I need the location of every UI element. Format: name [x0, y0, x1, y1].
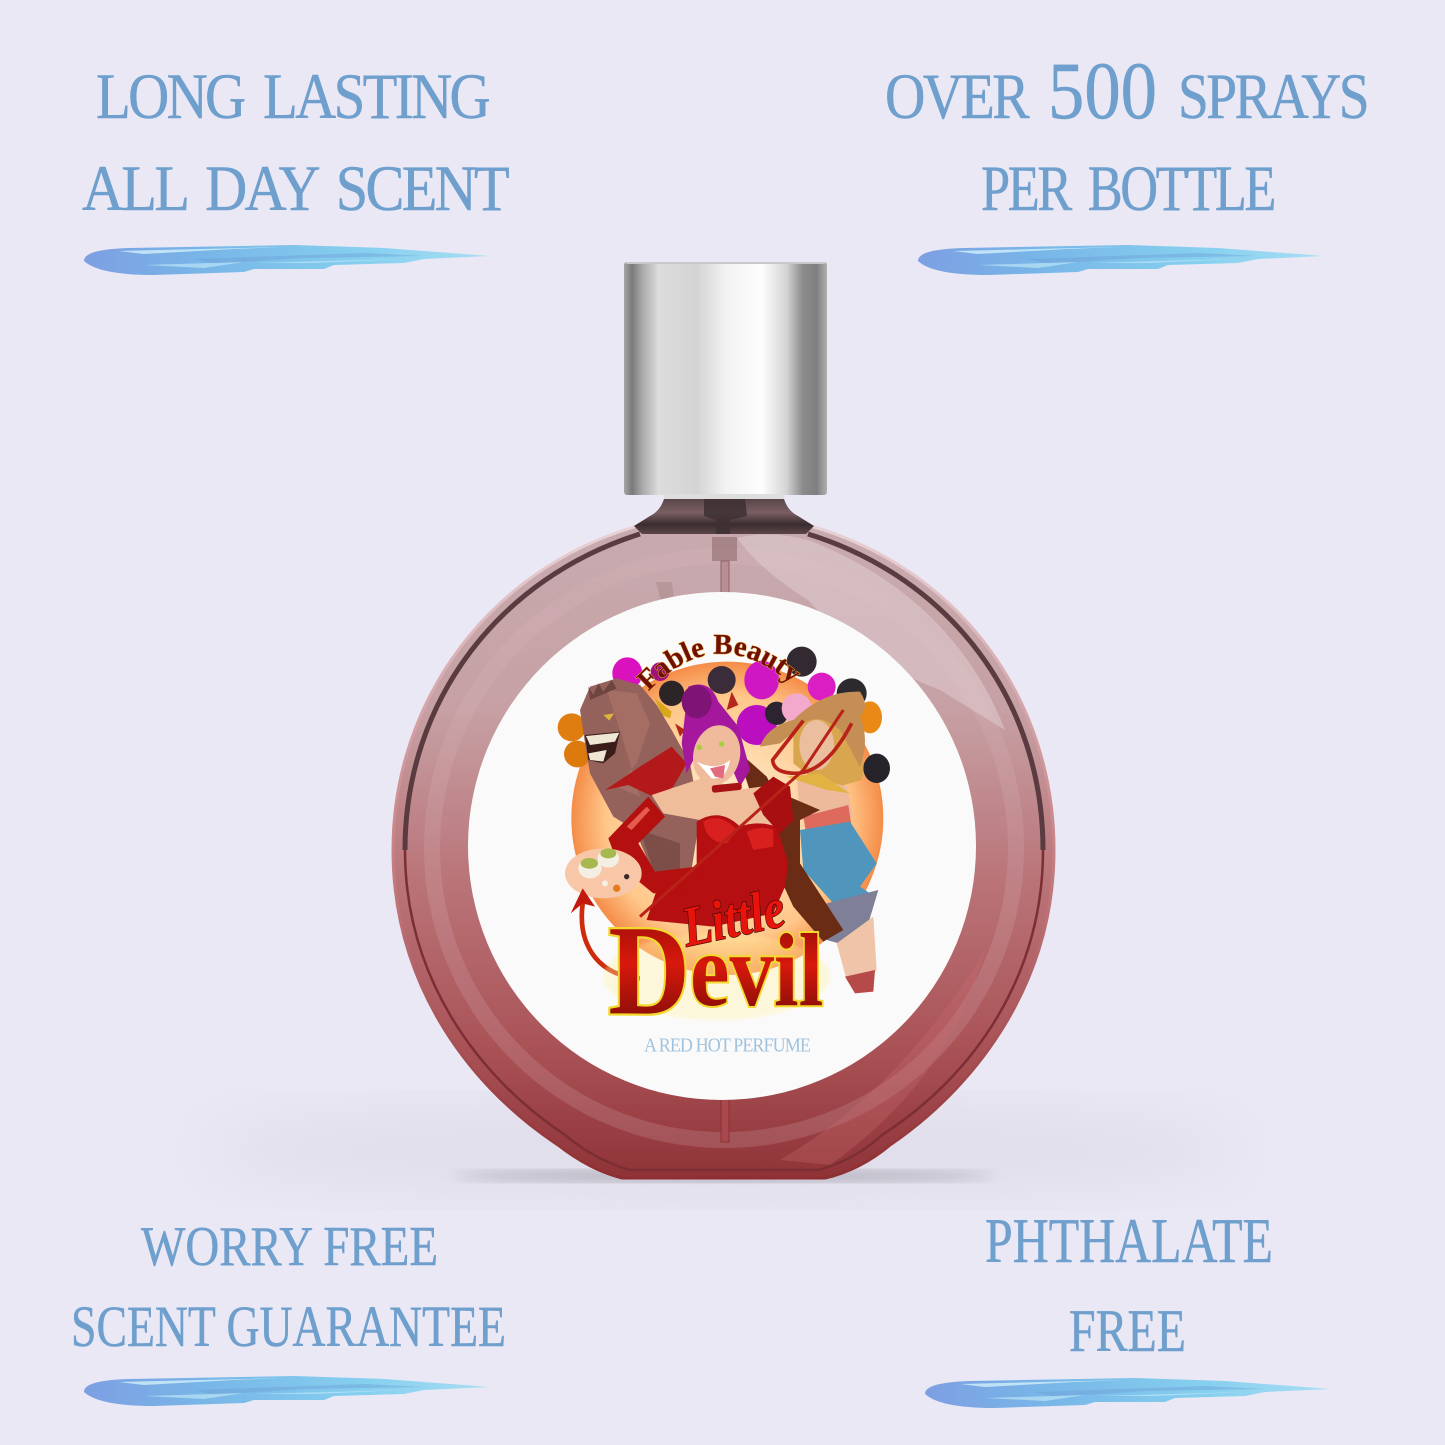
- heading: long lasting all day scent: LONG LASTING: [96, 61, 489, 133]
- lower reflection: [780, 950, 985, 1165]
- silver cap: [624, 262, 827, 499]
- heading: worry free scent guarantee: WORRY FREE: [141, 1216, 438, 1278]
- balloons: [558, 647, 890, 783]
- heading: worry free scent guarantee: SCENT GUARANTEE: [71, 1294, 506, 1359]
- round white label: [468, 592, 976, 1100]
- heading: phthalate free: [985, 1205, 1273, 1364]
- label illustration: [558, 634, 890, 1056]
- monster: [580, 678, 700, 900]
- brand arc text: Fable Beauty: Fable Beauty: [634, 634, 801, 692]
- inner dark rim upper: [405, 534, 1043, 850]
- heading: worry free scent guarantee: [71, 1216, 506, 1359]
- title: Little Devil: Little: [676, 877, 790, 960]
- heading: over 500 sprays per bottle: PER BOTTLE: [981, 153, 1274, 225]
- heading: over 500 sprays per bottle: [885, 45, 1367, 225]
- bottle neck: [634, 495, 814, 534]
- orange sun backdrop: [571, 662, 883, 975]
- heading: phthalate free: FREE: [1069, 1298, 1186, 1364]
- devil wings and cloak: [605, 747, 843, 942]
- heading: phthalate free: PHTHALATE: [985, 1205, 1273, 1276]
- inner dark rim lower: [405, 850, 1043, 1170]
- brush stroke: top left: [84, 245, 489, 275]
- brush stroke: bottom left: [84, 1376, 489, 1406]
- dip tube: [656, 537, 737, 1142]
- snack tray: [565, 848, 642, 898]
- devil woman: [608, 684, 793, 927]
- pitchfork: [640, 710, 852, 917]
- inner light band: [432, 556, 1016, 1140]
- tagline: A RED HOT PERFUME: [644, 1034, 811, 1056]
- heading: long lasting all day scent: [82, 61, 509, 225]
- scarecrow woman: [760, 692, 878, 993]
- glass body: [393, 510, 1054, 1178]
- neck collar shadow: [704, 497, 747, 534]
- title: Little Devil: evil: [690, 914, 823, 1028]
- brush stroke: top right: [918, 245, 1323, 275]
- title: Little Devil: D: [608, 899, 690, 1041]
- floor shadow: [202, 1100, 1242, 1200]
- devil tail: [571, 888, 640, 978]
- heading: long lasting all day scent: ALL DAY SCENT: [82, 153, 509, 225]
- heading: over 500 sprays per bottle: 500: [1048, 45, 1157, 136]
- brush stroke: bottom right: [925, 1378, 1330, 1408]
- heading: over 500 sprays per bottle: SPRAYS: [1178, 61, 1367, 133]
- glass highlight: [737, 534, 1005, 730]
- title: Little Devil: [603, 877, 830, 1041]
- perfume bottle: [393, 262, 1054, 1178]
- heading: over 500 sprays per bottle: OVER: [885, 61, 1030, 133]
